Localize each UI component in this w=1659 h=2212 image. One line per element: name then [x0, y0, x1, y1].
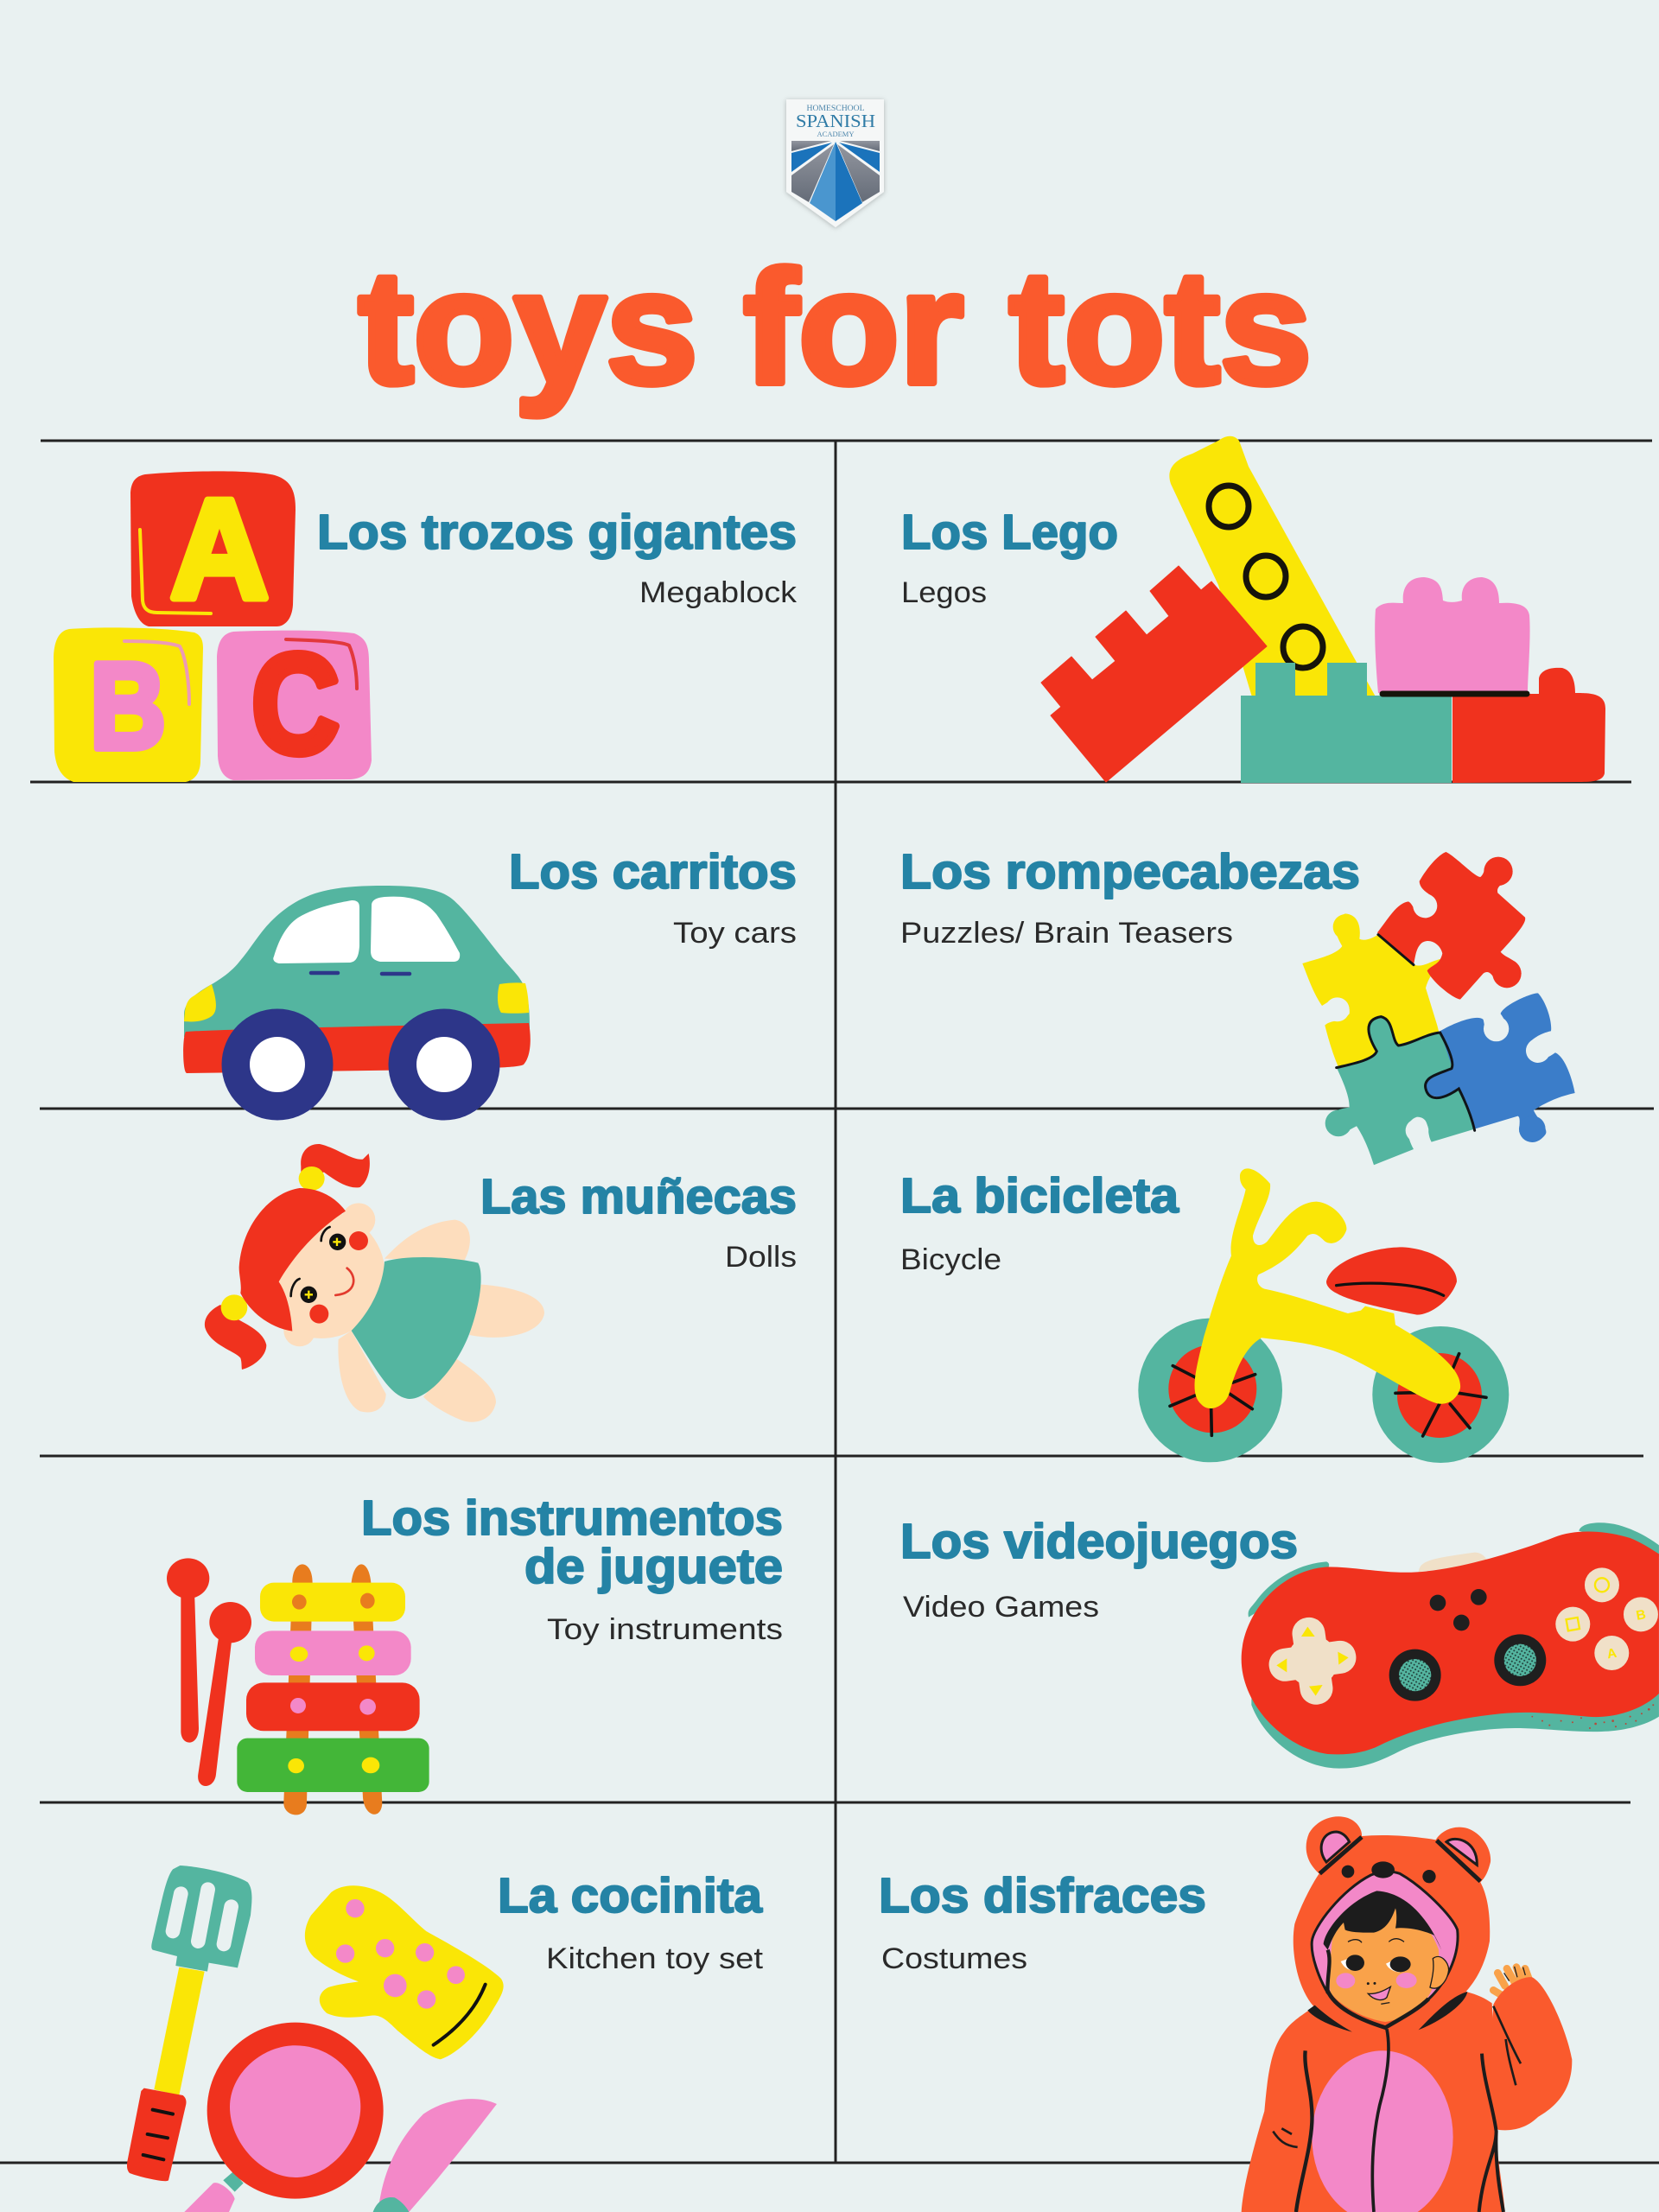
- icon: puzzle pieces: [1302, 852, 1575, 1165]
- logo: Homeschool Spanish Academy shield: SPANISH: [796, 111, 875, 131]
- translation: Toy cars: [673, 917, 797, 950]
- panel: La cocinita: [127, 1866, 764, 2212]
- translation: Toy instruments: [547, 1613, 783, 1646]
- panel: Los Lego: [901, 436, 1605, 783]
- panel: Los videojuegos: [900, 1514, 1659, 1769]
- translation: Video Games: [903, 1591, 1099, 1624]
- logo: Homeschool Spanish Academy shield: [786, 99, 884, 227]
- heading: Los videojuegos: [900, 1514, 1298, 1569]
- icon: doll: [205, 1144, 544, 1422]
- heading: de juguete: [524, 1539, 783, 1594]
- heading: La bicicleta: [900, 1168, 1179, 1224]
- translation: Dolls: [725, 1241, 797, 1274]
- heading: La cocinita: [498, 1868, 763, 1923]
- heading: Los disfraces: [879, 1868, 1206, 1923]
- icon: toy kitchen set: [127, 1866, 504, 2212]
- panel: Los trozos gigantes: [54, 470, 798, 783]
- icon: toy car: [183, 886, 531, 1120]
- logo: Homeschool Spanish Academy shield: ACADEMY: [817, 130, 855, 138]
- panel: Los rompecabezas: [900, 844, 1575, 1165]
- icon: alphabet blocks: B: [90, 638, 166, 775]
- translation: Megablock: [639, 576, 798, 609]
- translation: Kitchen toy set: [546, 1942, 764, 1975]
- icon: alphabet blocks: C: [251, 625, 340, 783]
- icon: game controller: B: [1635, 1607, 1647, 1624]
- title: toys for tots: [359, 238, 1312, 417]
- heading: [361, 1491, 783, 1594]
- icon: game controller: A: [1606, 1646, 1618, 1662]
- logo: Homeschool Spanish Academy shield: HOMESCHOOL: [807, 105, 865, 113]
- translation: Bicycle: [900, 1243, 1001, 1276]
- heading: Los carritos: [509, 844, 797, 899]
- translation: Legos: [901, 576, 987, 609]
- panel: La bicicleta: [900, 1168, 1509, 1463]
- heading: Los instrumentos: [361, 1491, 783, 1546]
- panel: Los disfraces: [879, 1816, 1572, 2212]
- translation: Puzzles/ Brain Teasers: [900, 917, 1233, 950]
- icon: balance bike: [1138, 1168, 1509, 1463]
- heading: Los rompecabezas: [900, 844, 1360, 899]
- translation: Costumes: [881, 1942, 1027, 1975]
- heading: Los trozos gigantes: [317, 505, 797, 560]
- icon: child in bear costume: [1242, 1816, 1572, 2212]
- icon: xylophone and mallets: [167, 1558, 429, 1815]
- icon: alphabet blocks: A: [170, 470, 269, 628]
- icon: lego bricks: [1041, 436, 1605, 783]
- panel: Las muñecas: [205, 1144, 797, 1422]
- panel: Los carritos: [183, 844, 797, 1120]
- heading: Las muñecas: [480, 1169, 797, 1224]
- panel: Los instrumentos de juguete: [167, 1491, 783, 1815]
- icon: alphabet blocks: [54, 470, 372, 783]
- heading: Los Lego: [901, 505, 1118, 560]
- icon: game controller: [1242, 1522, 1659, 1769]
